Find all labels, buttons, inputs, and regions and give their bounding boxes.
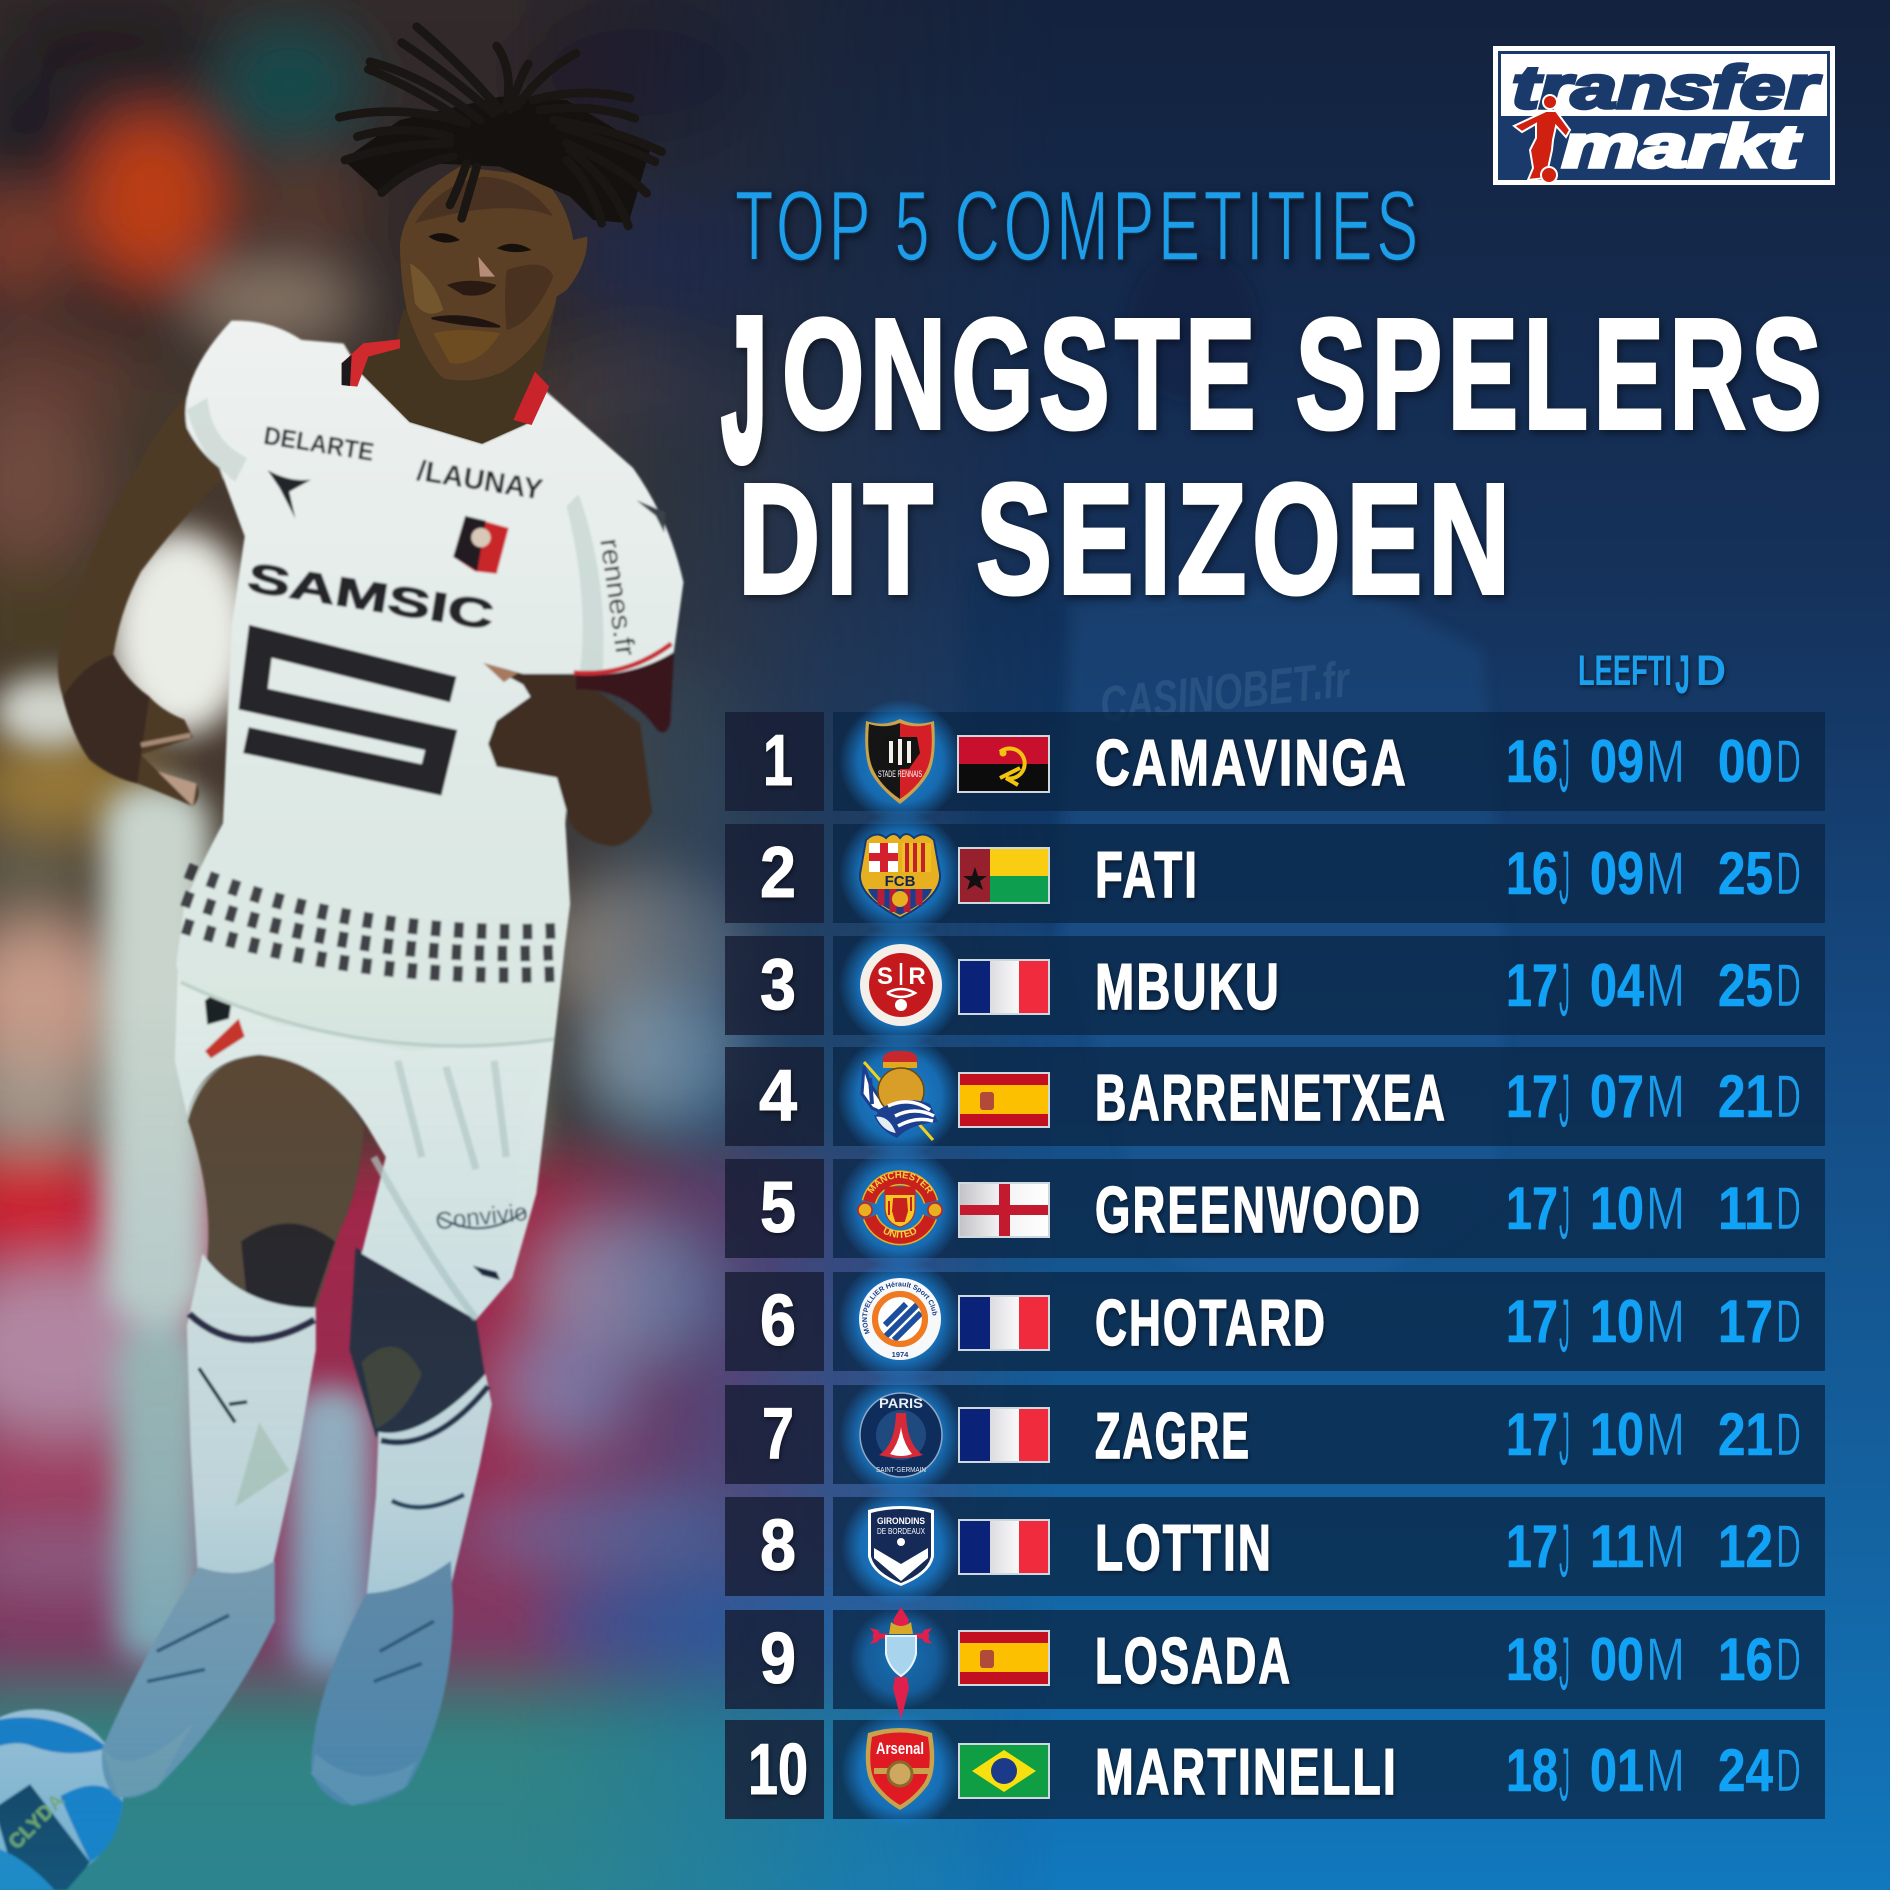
- crest: Girondins de Bordeaux: DE BORDEAUX: [877, 1527, 926, 1536]
- row 7: ZAGRE: [1095, 1399, 1251, 1472]
- bottom tint over photo: [0, 1114, 758, 1890]
- row 3: MBUKU: [1095, 950, 1281, 1023]
- row 1: CAMAVINGA: [1095, 726, 1408, 799]
- crest: Stade de Reims: S: [877, 963, 893, 990]
- age 9: [1506, 1622, 1801, 1707]
- ball: CLYDA: [4, 1789, 69, 1854]
- age 9: D: [1776, 1626, 1801, 1693]
- age 3: 17: [1506, 952, 1558, 1019]
- shirt hem pattern: [183, 870, 563, 975]
- age 5: 10: [1590, 1175, 1644, 1242]
- age 3: 25: [1718, 952, 1773, 1019]
- flag: Angola: [957, 735, 1050, 793]
- right forearm and hand: [483, 644, 674, 846]
- age 9: 16: [1718, 1626, 1773, 1693]
- row 7: 7: [762, 1394, 794, 1474]
- age 10: 24: [1718, 1737, 1774, 1804]
- shirt sponsors: rennes.fr: [594, 537, 641, 658]
- age 10: [1506, 1733, 1801, 1818]
- heading: top 5 competities: TOP 5 COMPETITIES: [735, 170, 1422, 281]
- age 8: 11: [1590, 1513, 1644, 1580]
- logo: transfermarkt: [1493, 46, 1835, 185]
- left arm: [58, 393, 223, 806]
- age 1: J: [1559, 724, 1570, 809]
- age 5: 11: [1718, 1175, 1773, 1242]
- collar: [342, 339, 549, 425]
- crest: Manchester United: [857, 1170, 943, 1246]
- crest: Arsenal: [866, 1728, 934, 1810]
- age 8: D: [1776, 1513, 1801, 1580]
- shirt sponsors: [244, 422, 665, 658]
- row 10: 10: [748, 1730, 808, 1810]
- age 4: 17: [1506, 1063, 1558, 1130]
- age 10: 01: [1590, 1737, 1644, 1804]
- age 6: 10: [1590, 1288, 1644, 1355]
- neck: [362, 300, 557, 444]
- age 6: 17: [1718, 1288, 1773, 1355]
- crest: Stade de Reims: R: [908, 963, 926, 990]
- crest: Montpellier: 1974: [892, 1350, 909, 1359]
- row 3: 3: [760, 945, 796, 1025]
- column heading: leeftijd: J: [1675, 643, 1690, 705]
- row 1: [725, 699, 1825, 823]
- row 2: [725, 811, 1825, 935]
- flag: Brazil: [958, 1743, 1050, 1799]
- age 4: M: [1646, 1063, 1685, 1130]
- back leg and boot: [311, 1248, 492, 1806]
- age 1: M: [1646, 728, 1685, 795]
- row 7: [725, 1373, 1825, 1497]
- age 2: J: [1559, 836, 1570, 921]
- head: [339, 27, 662, 444]
- age 4: 21: [1718, 1063, 1773, 1130]
- age 2: 09: [1590, 840, 1644, 907]
- ghost background player: [964, 247, 1507, 1326]
- row 6: CHOTARD: [1095, 1286, 1327, 1359]
- age 7: 10: [1590, 1401, 1644, 1468]
- row 10: [725, 1710, 1825, 1830]
- age 4: 07: [1590, 1063, 1644, 1130]
- ghost sponsor text: CASINOBET.fr: [1097, 651, 1354, 733]
- crest: Stade Rennais: STADE RENNAIS: [878, 769, 922, 779]
- age 2: M: [1646, 840, 1685, 907]
- hair: [339, 27, 662, 226]
- age 2: 16: [1506, 840, 1558, 907]
- crest: Paris Saint-Germain: SAINT-GERMAIN: [876, 1467, 926, 1474]
- age 10: M: [1646, 1737, 1685, 1804]
- shirt number: [246, 641, 453, 780]
- age 6: J: [1559, 1284, 1570, 1369]
- crest: Real Sociedad: [862, 1051, 938, 1140]
- age 7: [1506, 1397, 1801, 1482]
- age 7: D: [1776, 1401, 1801, 1468]
- age 8: 17: [1506, 1513, 1558, 1580]
- shirt sponsors: DELARTE: [262, 422, 376, 467]
- age 3: D: [1776, 952, 1801, 1019]
- flag: France: [958, 1295, 1050, 1351]
- age 3: M: [1646, 952, 1685, 1019]
- age 9: J: [1559, 1622, 1570, 1707]
- age 6: [1506, 1284, 1801, 1369]
- title line 1: J: [722, 276, 766, 502]
- front leg and boot: [102, 1055, 364, 1798]
- player illustration: [0, 27, 683, 1890]
- age 4: D: [1776, 1063, 1801, 1130]
- column heading: leeftijd: LEEFTI: [1578, 647, 1672, 695]
- age 3: J: [1559, 948, 1570, 1033]
- age 6: D: [1776, 1288, 1801, 1355]
- age 7: 17: [1506, 1401, 1558, 1468]
- age 1: 00: [1718, 728, 1773, 795]
- age 1: [1506, 724, 1801, 809]
- age 3: 04: [1590, 952, 1645, 1019]
- row 8: [725, 1486, 1825, 1606]
- flag: France: [958, 1519, 1050, 1575]
- shirt sponsors: SAMSIC: [244, 554, 497, 638]
- row 8: 8: [760, 1506, 796, 1586]
- age 3: [1506, 948, 1801, 1033]
- ball: [0, 1709, 123, 1890]
- crest: Paris Saint-Germain: PARIS: [879, 1395, 923, 1411]
- crest: Stade de Reims: [860, 944, 942, 1026]
- age 2: D: [1776, 840, 1801, 907]
- row 9: LOSADA: [1095, 1624, 1292, 1697]
- crest: Paris Saint-Germain: [860, 1393, 942, 1477]
- crest: Girondins de Bordeaux: GIRONDINS: [877, 1516, 925, 1527]
- face: [400, 167, 587, 381]
- age 5: 17: [1506, 1175, 1558, 1242]
- row 9: [725, 1606, 1825, 1720]
- age 2: [1506, 836, 1801, 921]
- age 10: J: [1559, 1733, 1570, 1818]
- row 5: 5: [760, 1168, 796, 1248]
- shirt sponsors: /LAUNAY: [415, 455, 545, 506]
- age 7: J: [1559, 1397, 1570, 1482]
- crest: Montpellier: [859, 1278, 941, 1360]
- crest: Manchester United: UNITED: [884, 1227, 916, 1238]
- shirt: [176, 321, 683, 1051]
- age 4: [1506, 1059, 1801, 1144]
- age 8: 12: [1718, 1513, 1773, 1580]
- age 9: M: [1646, 1626, 1685, 1693]
- age 10: 18: [1506, 1737, 1558, 1804]
- age 7: M: [1646, 1401, 1685, 1468]
- ranking table: [725, 701, 1825, 1824]
- crest: Girondins de Bordeaux: [868, 1506, 934, 1586]
- age 8: J: [1559, 1509, 1570, 1594]
- crest: FC Barcelona: FCB: [885, 873, 916, 890]
- age 8: [1506, 1509, 1801, 1594]
- row 6: [725, 1262, 1825, 1378]
- age 6: M: [1646, 1288, 1685, 1355]
- row 4: [725, 1034, 1825, 1158]
- row 10: MARTINELLI: [1095, 1735, 1398, 1808]
- age 9: 00: [1590, 1626, 1644, 1693]
- row 5: GREENWOOD: [1095, 1173, 1422, 1246]
- club badge on shirt: [453, 516, 509, 574]
- flag: Spain: [958, 1630, 1050, 1686]
- crest: Manchester United: MANCHESTER: [867, 1171, 932, 1194]
- age 10: D: [1776, 1737, 1801, 1804]
- logo: transfermarkt: markt: [1562, 113, 1802, 180]
- age 2: 25: [1718, 840, 1773, 907]
- row 4: BARRENETXEA: [1095, 1061, 1447, 1134]
- row 9: 9: [760, 1619, 796, 1699]
- crest: Montpellier: MONTPELLIER Hérault Sport Club: [862, 1282, 938, 1334]
- flag: France: [958, 959, 1050, 1015]
- icon: red footballer: [1514, 95, 1570, 183]
- row 2: 2: [760, 833, 796, 913]
- crest: Stade Rennais: [865, 719, 935, 804]
- row 3: [725, 923, 1825, 1047]
- age 5: J: [1559, 1171, 1570, 1256]
- crest: FC Barcelona: [860, 834, 940, 918]
- row 4: 4: [759, 1056, 797, 1136]
- flag: Guinea-Bissau: [958, 847, 1050, 904]
- row 2: FATI: [1095, 838, 1199, 911]
- age 7: 21: [1718, 1401, 1773, 1468]
- shorts: [175, 952, 564, 1320]
- row 1: 1: [763, 721, 793, 801]
- column heading: leeftijd: D: [1696, 647, 1726, 695]
- row 5: [725, 1150, 1825, 1266]
- logo: transfermarkt: transfer: [1512, 54, 1822, 121]
- right gradient panel: [530, 0, 1890, 1890]
- row 6: 6: [760, 1281, 796, 1361]
- age 5: M: [1646, 1175, 1685, 1242]
- age 4: J: [1559, 1059, 1570, 1144]
- row 8: LOTTIN: [1095, 1511, 1273, 1584]
- flag: England: [958, 1182, 1050, 1238]
- crest: Celta de Vigo: [870, 1607, 932, 1720]
- age 6: 17: [1506, 1288, 1558, 1355]
- age 9: 18: [1506, 1626, 1558, 1693]
- age 1: D: [1776, 728, 1801, 795]
- title line 2: DIT SEIZOEN: [738, 452, 1516, 627]
- age 5: [1506, 1171, 1801, 1256]
- age 8: M: [1646, 1513, 1685, 1580]
- crest: Arsenal: Arsenal: [876, 1739, 924, 1758]
- age 1: 09: [1590, 728, 1644, 795]
- shorts: Convivio: [434, 1199, 529, 1235]
- age 5: D: [1776, 1175, 1801, 1242]
- age 1: 16: [1506, 728, 1558, 795]
- flag: Spain: [958, 1072, 1050, 1128]
- flag: France: [958, 1407, 1050, 1463]
